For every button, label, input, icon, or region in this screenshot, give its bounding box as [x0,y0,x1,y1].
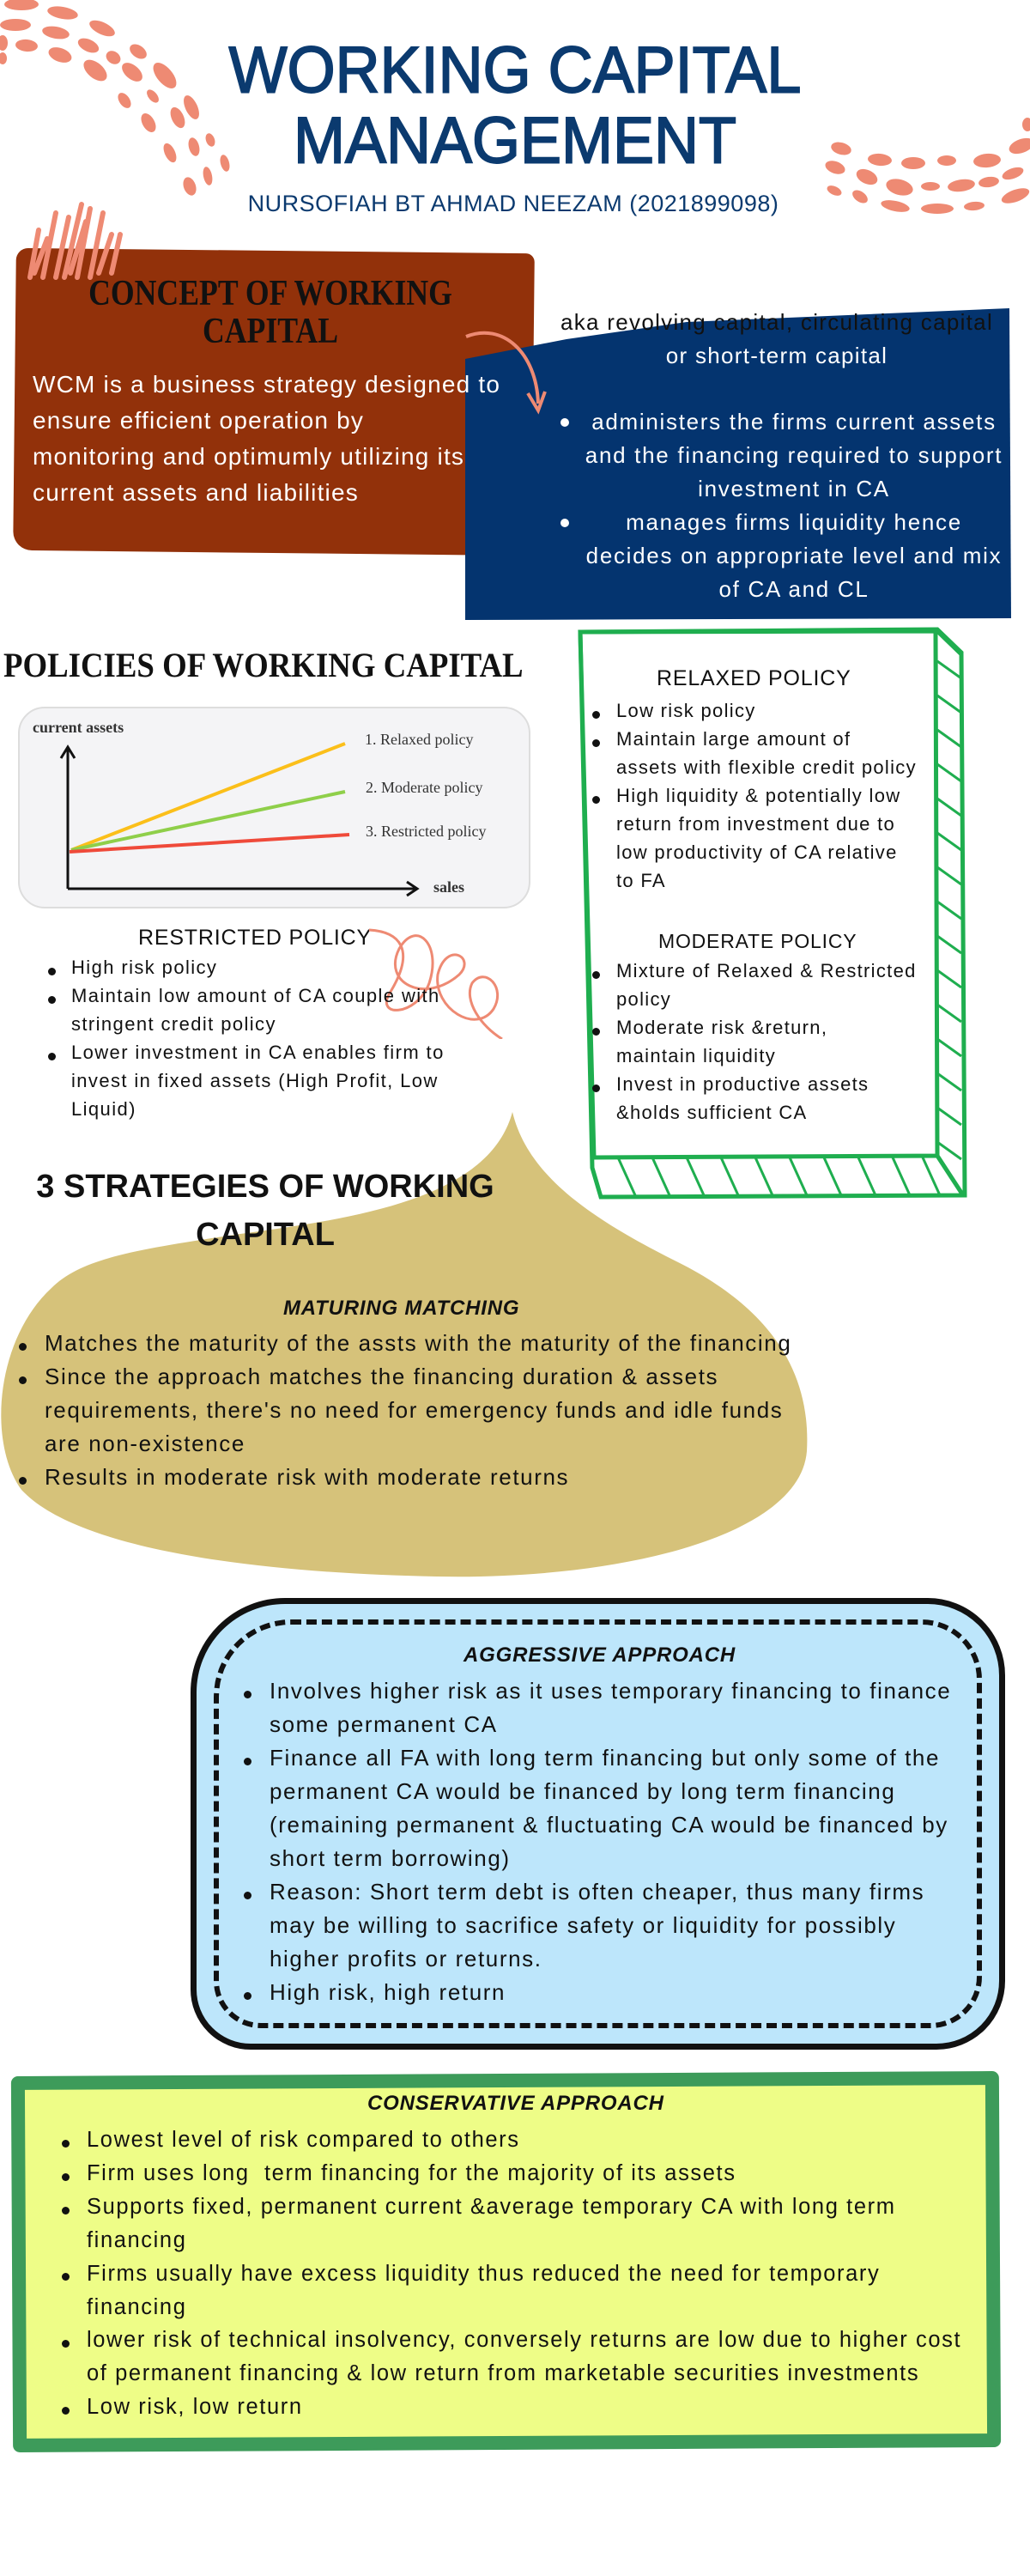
heading: moderate: MODERATE POLICY [658,930,857,952]
text: WCM definition: WCM is a business strategy designed to [33,371,500,398]
list: restricted: Maintain low amount of CA couple with [71,985,440,1006]
list: aggressive: may be willing to sacrifice safety or liquidity for possibly [270,1912,896,1938]
title: WORKING CAPITAL [229,33,801,106]
list: navy bullets: manages firms liquidity hence [626,509,962,535]
list: conservative: Low risk, low return [87,2395,303,2419]
subtitle: NURSOFIAH BT AHMAD NEEZAM (2021899098) [248,191,779,216]
chart: policies [18,707,530,908]
heading: strategies: 3 STRATEGIES OF WORKING [36,1169,494,1205]
panel: concept brown [13,248,535,556]
icon: scribble [27,202,123,280]
list: maturing: are non-existence [45,1431,245,1456]
list: navy bullets: decides on appropriate level and mix [586,543,1002,568]
list: relaxed: return from investment due to [616,813,895,835]
list: moderate [592,960,917,1123]
text: WCM definition [33,371,500,506]
panel: relaxed/moderate green box [578,627,966,1199]
text: aka: or short-term capital [666,343,888,368]
list: moderate: Mixture of Relaxed & Restricted [616,960,917,981]
list: conservative [62,2128,961,2419]
list: relaxed: low productivity of CA relative [616,841,898,863]
list: restricted [48,957,445,1120]
heading: concept: CAPITAL [203,312,338,351]
list: relaxed: Maintain large amount of [616,728,851,750]
chart: policies: 1. Relaxed policy [365,731,473,748]
title: MANAGEMENT [294,104,736,177]
arrow [465,331,547,414]
heading: policies: POLICIES OF WORKING CAPITAL [3,646,524,684]
list: maturing: Results in moderate risk with moderate returns [45,1464,569,1490]
panel: navy [465,308,1011,620]
panel: conservative [11,2071,1001,2452]
text: WCM definition: monitoring and optimumly utilizing its [33,443,464,470]
heading: concept: CONCEPT OF WORKING [88,274,452,313]
list: aggressive: short term borrowing) [270,1845,511,1871]
heading: conservative: CONSERVATIVE APPROACH [367,2092,664,2115]
list: navy bullets: and the financing required to support [585,442,1003,468]
list: maturing: Matches the maturity of the assts with the maturity of the financing [45,1330,791,1356]
text: WCM definition: current assets and liabilities [33,479,359,506]
heading: maturing: MATURING MATCHING [283,1297,519,1320]
chart: policies: 3. Restricted policy [366,823,486,840]
list: conservative: Firm uses long term financing for the majority of its assets [87,2161,736,2185]
list: restricted: Liquid) [71,1098,136,1120]
panel: maturing matching blob [1,1112,807,1577]
list: conservative: financing [87,2228,186,2252]
list: conservative: of permanent financing & low return from marketable securities investments [87,2361,919,2385]
panel: aggressive [191,1598,1005,2050]
list: moderate: policy [616,988,671,1010]
text: aka: aka revolving capital, circulating capital [560,309,993,335]
list: conservative: lower risk of technical insolvency, conversely returns are low due to higher cost [87,2328,961,2352]
list: moderate: &holds sufficient CA [616,1102,807,1123]
list: conservative: Lowest level of risk compared to others [87,2128,520,2152]
list: navy bullets: of CA and CL [718,576,869,602]
heading: aggressive: AGGRESSIVE APPROACH [464,1643,736,1667]
list: aggressive: permanent CA would be financed by long term financing [270,1778,895,1804]
list: aggressive: Finance all FA with long term financing but only some of the [270,1745,940,1771]
list: aggressive: High risk, high return [270,1979,506,2005]
list: restricted: invest in fixed assets (High Profit, Low [71,1070,439,1091]
list: relaxed [592,700,917,891]
list: aggressive: (remaining permanent & fluctuating CA would be financed by [270,1812,948,1838]
title [228,33,801,177]
list: navy bullets [560,409,1003,602]
list: aggressive [244,1678,951,2005]
list: moderate: maintain liquidity [616,1045,776,1066]
list: maturing: requirements, there's no need for emergency funds and idle funds [45,1397,783,1423]
list: aggressive: Reason: Short term debt is often cheaper, thus many firms [270,1879,924,1905]
heading: strategies [36,1169,494,1253]
list: aggressive: Involves higher risk as it uses temporary financing to finance [270,1678,951,1704]
list: relaxed: to FA [616,870,666,891]
heading: restricted: RESTRICTED POLICY [138,926,372,950]
list: moderate: Invest in productive assets [616,1073,869,1095]
heading: relaxed: RELAXED POLICY [657,666,851,690]
list: restricted: Lower investment in CA enables firm to [71,1042,445,1063]
list: restricted: stringent credit policy [71,1013,276,1035]
heading: strategies: CAPITAL [196,1217,335,1253]
list: conservative: financing [87,2295,186,2319]
text: aka [560,309,993,368]
list: aggressive: some permanent CA [270,1711,498,1737]
list: aggressive: higher profits or returns. [270,1946,542,1971]
chart: policies: sales [433,878,464,896]
list: navy bullets: investment in CA [698,476,890,501]
list: maturing: Since the approach matches the financing duration & assets [45,1364,718,1389]
list: relaxed: Low risk policy [616,700,756,721]
chart: policies: 2. Moderate policy [366,779,482,796]
list: conservative: Firms usually have excess liquidity thus reduced the need for temporary [87,2262,880,2286]
list: conservative: Supports fixed, permanent current &average temporary CA with long term [87,2195,896,2219]
list: moderate: Moderate risk &return, [616,1017,827,1038]
icon: swirl [369,929,503,1039]
decorative dashes [0,0,1030,214]
list: maturing [19,1330,791,1490]
text: WCM definition: ensure efficient operation by [33,407,364,434]
chart: policies: current assets [33,719,124,736]
list: relaxed: assets with flexible credit policy [616,756,917,778]
list: restricted: High risk policy [71,957,217,978]
heading: concept [88,274,452,351]
list: relaxed: High liquidity & potentially low [616,785,900,806]
list: navy bullets: administers the firms current assets [591,409,997,434]
